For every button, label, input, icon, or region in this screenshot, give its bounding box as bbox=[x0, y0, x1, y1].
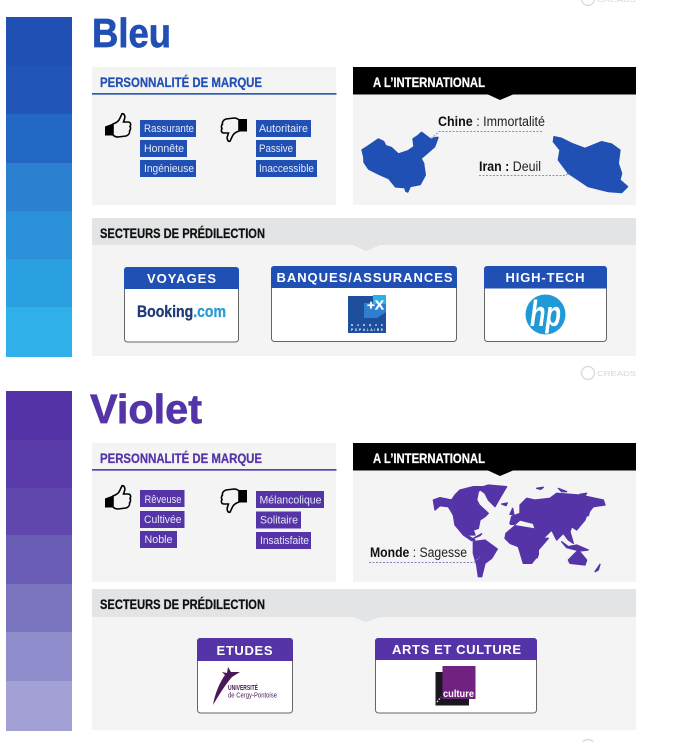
logo: banque populaire bbox=[348, 295, 386, 333]
tags: negative traits: Solitaire bbox=[260, 514, 298, 526]
panel: secteurs de prédilection (bleu) bbox=[92, 218, 636, 356]
tags: negative traits: Inaccessible bbox=[259, 163, 314, 175]
tags: negative traits: Autoritaire bbox=[259, 123, 308, 135]
card: arts et culture bbox=[375, 638, 537, 713]
label: chine: Chine : Immortalité bbox=[438, 114, 545, 129]
card: high-tech bbox=[484, 266, 607, 342]
card: voyages: VOYAGES bbox=[147, 271, 216, 286]
tags: negative traits: Insatisfaite bbox=[260, 535, 309, 547]
map: iran bbox=[553, 137, 628, 193]
logo: booking.com: Booking.com bbox=[137, 302, 226, 321]
tags: positive traits: Ingénieuse bbox=[144, 163, 194, 175]
violet colour swatch strip bbox=[6, 391, 72, 731]
tags: positive traits: Rêveuse bbox=[144, 494, 182, 506]
title: Violet: Violet bbox=[90, 386, 202, 432]
panel: personnalité de marque (violet) bbox=[92, 443, 336, 582]
map: china bbox=[362, 133, 438, 192]
logo: université de cergy-pontoise: UNIVERSITÉ bbox=[228, 683, 258, 692]
card: etudes bbox=[197, 638, 293, 713]
tags: positive traits: Honnête bbox=[144, 143, 184, 155]
icon: thumbs down bbox=[221, 118, 247, 141]
logo: banque populaire: POPULAIRE bbox=[351, 328, 383, 332]
card: arts et culture: ARTS ET CULTURE bbox=[392, 642, 521, 657]
icon: thumbs down bbox=[221, 489, 247, 512]
logo: france culture bbox=[436, 666, 476, 706]
heading: secteurs: SECTEURS DE PRÉDILECTION bbox=[100, 226, 265, 241]
blue colour swatch strip bbox=[6, 17, 72, 357]
tags: positive traits bbox=[140, 490, 184, 548]
tags: positive traits: Rassurante bbox=[144, 123, 194, 135]
label: iran: Iran : Deuil bbox=[479, 159, 541, 174]
watermark: top creads logo bbox=[582, 0, 636, 6]
label: chine bbox=[431, 114, 545, 139]
panel: personnalité de marque (bleu) bbox=[92, 67, 336, 205]
panel: a l'international (violet) bbox=[353, 443, 636, 582]
card: voyages bbox=[124, 267, 239, 342]
map: world bbox=[433, 485, 605, 577]
icon: thumbs up bbox=[105, 486, 131, 509]
logo: france culture: culture bbox=[443, 689, 474, 700]
panel: a l'international (bleu) bbox=[353, 67, 636, 205]
logo: université de cergy-pontoise bbox=[213, 667, 277, 705]
tags: negative traits bbox=[256, 491, 324, 549]
tags: negative traits: Passive bbox=[259, 143, 293, 155]
watermark: middle creads logo: CREADS bbox=[597, 371, 636, 378]
panel: secteurs de prédilection (violet) bbox=[92, 589, 636, 730]
tags: positive traits bbox=[140, 120, 196, 177]
heading: secteurs: SECTEURS DE PRÉDILECTION bbox=[100, 597, 265, 612]
title: Bleu: Bleu bbox=[92, 10, 171, 56]
tags: positive traits: Noble bbox=[144, 534, 172, 546]
label: monde: Monde : Sagesse bbox=[370, 545, 467, 560]
icon: thumbs up bbox=[105, 114, 131, 137]
card: banques/assurances bbox=[271, 266, 457, 342]
heading: a l'international: A L’INTERNATIONAL bbox=[373, 75, 485, 90]
tags: positive traits: Cultivée bbox=[144, 514, 182, 526]
heading: a l'international: A L’INTERNATIONAL bbox=[373, 451, 485, 466]
watermark: bottom creads logo bbox=[582, 740, 594, 742]
label: iran bbox=[479, 159, 569, 176]
heading: personnalité de marque: PERSONNALITÉ DE MARQUE bbox=[100, 451, 262, 466]
tags: negative traits: Mélancolique bbox=[260, 494, 322, 506]
logo: hp: hp bbox=[530, 293, 561, 334]
tags: negative traits bbox=[256, 120, 317, 177]
watermark: middle creads logo bbox=[582, 366, 636, 380]
logo: banque populaire: +X bbox=[367, 298, 384, 312]
card: high-tech: HIGH-TECH bbox=[506, 270, 584, 285]
logo: université de cergy-pontoise: de Cergy-Pontoise bbox=[228, 692, 277, 700]
logo: banque populaire: BANQUE bbox=[351, 323, 383, 327]
card: banques/assurances: BANQUES/ASSURANCES bbox=[276, 270, 453, 285]
card: etudes: ETUDES bbox=[216, 643, 273, 658]
heading: personnalité de marque: PERSONNALITÉ DE MARQUE bbox=[100, 75, 262, 90]
